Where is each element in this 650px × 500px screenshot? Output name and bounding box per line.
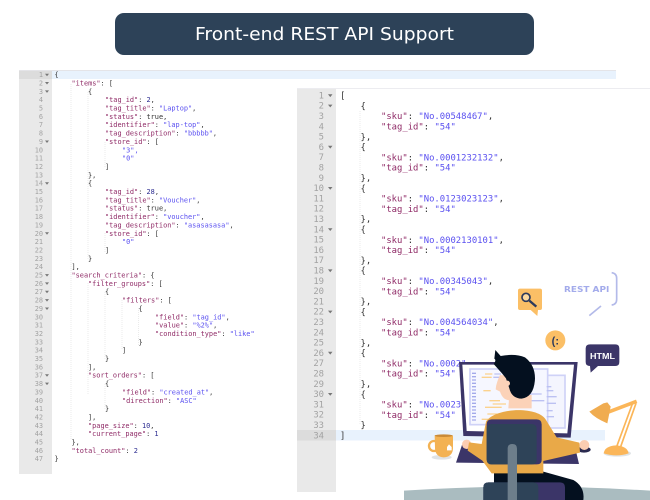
line numbers: left panel: 41 [35,405,43,413]
title banner [115,13,534,55]
line numbers: left panel: 38 [35,380,43,388]
code: items JSON: "status": true, [105,113,167,121]
icon: emoticon circle: (: [552,335,559,347]
code: SKU JSON: "sku": "No.0001232132", [381,153,504,163]
line numbers: left panel: 37 [35,372,43,380]
code: SKU JSON: { [360,184,366,194]
code: items JSON: "store_id": [ [105,230,159,238]
callout: HTML: HTML [590,351,615,361]
line numbers: right panel: 7 [319,153,324,163]
code: SKU JSON: "tag_id": "54" [381,246,456,256]
line numbers: left panel: 20 [35,230,43,238]
code: items JSON: "direction": "ASC" [122,397,197,405]
line numbers: right panel: 9 [319,174,324,184]
line numbers: left panel: 4 [39,96,43,104]
line numbers: right panel: 31 [313,400,324,410]
line numbers: right panel: 14 [313,225,324,235]
line numbers: right panel: 15 [313,236,324,246]
line numbers: right panel: 20 [313,287,324,297]
line numbers: left panel: 27 [35,288,43,296]
line numbers: right panel: 25 [313,339,324,349]
code: items JSON: "tag_description": "bbbbb", [105,130,217,138]
code: SKU JSON: "tag_id": "54" [381,329,456,339]
code: SKU JSON: }, [360,256,371,266]
line numbers: left panel: 28 [35,297,43,305]
line numbers: right panel: 28 [313,370,324,380]
code: items JSON: { [54,71,59,79]
code: SKU JSON: [ [340,92,345,102]
code: SKU JSON: { [360,349,366,359]
code: SKU JSON: { [360,102,366,112]
line numbers: right panel: 10 [313,184,324,194]
code: items JSON: { [105,288,109,296]
code: items JSON: "filters": [ [122,297,172,305]
code: items JSON: "field": "tag_id", [155,313,230,321]
code: SKU JSON: { [360,267,366,277]
line numbers: left panel: 6 [39,113,43,121]
line numbers: left panel: 33 [35,338,43,346]
line numbers: left panel: 30 [35,313,43,321]
person [462,350,589,500]
callout: REST API [564,273,617,316]
line numbers: left panel: 21 [35,238,43,246]
line numbers: right panel: 11 [313,194,324,204]
line numbers: left panel: 14 [35,180,43,188]
code: SKU JSON: "tag_id": "54" [381,122,456,132]
code: items JSON: } [138,338,143,346]
line numbers: right panel: 19 [313,277,324,287]
line numbers: left panel: 34 [35,347,43,355]
code: items JSON: "3", [122,146,139,154]
code: items JSON: "field": "created_at", [122,388,213,396]
line numbers: left panel: 43 [35,422,43,430]
code: items JSON: { [105,380,109,388]
callout: HTML [586,344,619,373]
code: SKU JSON: "tag_id": "54" [381,370,456,380]
line numbers: right panel: 34 [313,431,324,441]
line numbers: left panel: 17 [35,205,43,213]
floor [404,487,650,500]
line numbers: right panel: 33 [313,421,324,431]
panel: items JSON response [19,70,616,474]
line numbers: left panel: 8 [39,130,43,138]
code: items JSON: ] [105,246,109,254]
line numbers: left panel: 47 [35,455,43,463]
line numbers: left panel: 31 [35,322,43,330]
code: SKU JSON: "sku": "No.0002130101", [381,236,504,246]
line numbers: left panel: 13 [35,171,43,179]
code: items JSON: { [88,88,92,96]
code: items JSON: } [105,405,109,413]
code: items JSON: "status": true, [105,205,167,213]
title banner: Front-end REST API Support [195,24,454,45]
code: SKU JSON: } [360,421,366,431]
code: items JSON: }, [88,171,96,179]
code: SKU JSON: }, [360,298,371,308]
line numbers: left panel: 11 [35,155,43,163]
code: items JSON: "tag_title": "Voucher", [105,196,200,204]
line numbers: right panel: 2 [319,102,324,112]
code: items JSON: "value": "%2%", [155,322,217,330]
code: SKU JSON: }, [360,380,371,390]
code: items JSON: "store_id": [ [105,138,159,146]
code: SKU JSON: { [360,226,366,236]
line numbers: left panel: 12 [35,163,43,171]
code: items JSON: "condition_type": "like" [155,330,255,338]
line numbers: left panel: 22 [35,246,43,254]
code: SKU JSON: }, [360,133,371,143]
code: items JSON: "tag_id": 2, [105,96,155,104]
line numbers: left panel: 23 [35,255,43,263]
line numbers: right panel: 21 [313,297,324,307]
line numbers: left panel: 40 [35,397,43,405]
code: items JSON: "tag_description": "asasasasa", [105,221,234,229]
line numbers: right panel: 6 [319,143,324,153]
code: SKU JSON: "sku": "No.004564034", [381,318,499,328]
icon: coffee cup [429,434,453,460]
code: SKU JSON: "sku": "No.00548467", [381,112,493,122]
line numbers: left panel: 3 [39,88,43,96]
line numbers: right panel: 30 [313,390,324,400]
code: items JSON: ], [72,263,80,271]
code: SKU JSON: "tag_id": "54" [381,205,456,215]
code: items JSON: ] [122,347,126,355]
line numbers: right panel: 4 [319,122,324,132]
line numbers: left panel: 1 [39,71,43,79]
code: items JSON: "search_criteria": { [72,272,154,280]
line numbers: left panel: 25 [35,272,43,280]
callout: REST API: REST API [564,284,609,294]
line numbers: right panel: 27 [313,359,324,369]
line numbers: left panel: 2 [39,79,43,87]
line numbers: left panel: 46 [35,447,43,455]
code: items JSON: "items": [ [72,79,113,87]
line numbers: right panel: 1 [319,91,324,101]
code: items JSON: "0" [122,238,134,246]
code: SKU JSON: "sku": "No.0002" [381,359,466,369]
line numbers: left panel: 5 [39,104,43,112]
line numbers: right panel: 17 [313,256,324,266]
line numbers: left panel: 42 [35,413,43,421]
line numbers: left panel: 9 [39,138,43,146]
monitor [459,362,578,438]
line numbers: right panel: 22 [313,308,324,318]
code: SKU JSON: "tag_id": "54" [381,164,456,174]
code: items JSON: { [88,180,92,188]
desk keyboard [456,445,579,464]
line numbers: right panel: 29 [313,380,324,390]
line numbers: left panel: 10 [35,146,43,154]
panel: SKU JSON response [297,88,650,492]
code: items JSON: "identifier": "lap-top", [105,121,205,129]
icon: emoticon circle [545,330,565,350]
code: items JSON: "tag_id": 28, [105,188,159,196]
line numbers: right panel: 18 [313,267,324,277]
line numbers: right panel: 5 [319,133,324,143]
code: items JSON: "filter_groups": [ [88,280,163,288]
code: SKU JSON: }, [360,174,371,184]
code: SKU JSON: { [360,390,366,400]
code: SKU JSON: }, [360,339,371,349]
code: items JSON: "sort_orders": [ [88,372,154,380]
line numbers: left panel: 29 [35,305,43,313]
line numbers: left panel: 15 [35,188,43,196]
line numbers: left panel: 19 [35,221,43,229]
code: SKU JSON: { [360,143,366,153]
code: items JSON: "current_page": 1 [88,430,159,438]
icon: desk lamp [589,401,637,457]
code: items JSON: ] [105,163,109,171]
code: SKU JSON: "tag_id": "54" [381,411,456,421]
illustration: developer at computer [404,273,650,500]
line numbers: left panel: 36 [35,363,43,371]
line numbers: left panel: 45 [35,439,43,447]
line numbers: right panel: 24 [313,328,324,338]
line numbers: left panel: 39 [35,388,43,396]
icon: magnifier bubble [518,289,542,316]
code: items JSON: ], [88,363,96,371]
code: items JSON: "0" [122,155,134,163]
line numbers: left panel: 35 [35,355,43,363]
line numbers: left panel: 7 [39,121,43,129]
mouse [577,447,591,453]
code: items JSON: }, [72,439,80,447]
code: items JSON: } [54,455,59,463]
code: items JSON: "page_size": 10, [88,422,154,430]
line numbers: right panel: 3 [319,112,324,122]
code: SKU JSON: "sku": "No.00345043", [381,277,493,287]
code: SKU JSON: "sku": "No.00234" [381,401,472,411]
code: SKU JSON: ] [340,431,345,441]
code: SKU JSON: { [360,308,366,318]
line numbers: right panel: 16 [313,246,324,256]
code: items JSON: "tag_title": "Laptop", [105,104,196,112]
code: items JSON: { [138,305,143,313]
line numbers: left panel: 24 [35,263,43,271]
line numbers: left panel: 44 [35,430,43,438]
code: SKU JSON: }, [360,215,371,225]
code: SKU JSON: "sku": "No.0123023123", [381,195,504,205]
line numbers: left panel: 16 [35,196,43,204]
line numbers: right panel: 13 [313,215,324,225]
code: items JSON: "identifier": "voucher", [105,213,205,221]
code: SKU JSON: "tag_id": "54" [381,287,456,297]
code: items JSON: } [88,255,92,263]
line numbers: right panel: 32 [313,411,324,421]
code: items JSON: } [105,355,109,363]
code: items JSON: "total_count": 2 [72,447,138,455]
line numbers: left panel: 18 [35,213,43,221]
code: items JSON: ], [88,413,96,421]
line numbers: right panel: 23 [313,318,324,328]
office chair [483,419,565,500]
line numbers: right panel: 26 [313,349,324,359]
line numbers: left panel: 32 [35,330,43,338]
line numbers: right panel: 8 [319,164,324,174]
line numbers: left panel: 26 [35,280,43,288]
line numbers: right panel: 12 [313,205,324,215]
